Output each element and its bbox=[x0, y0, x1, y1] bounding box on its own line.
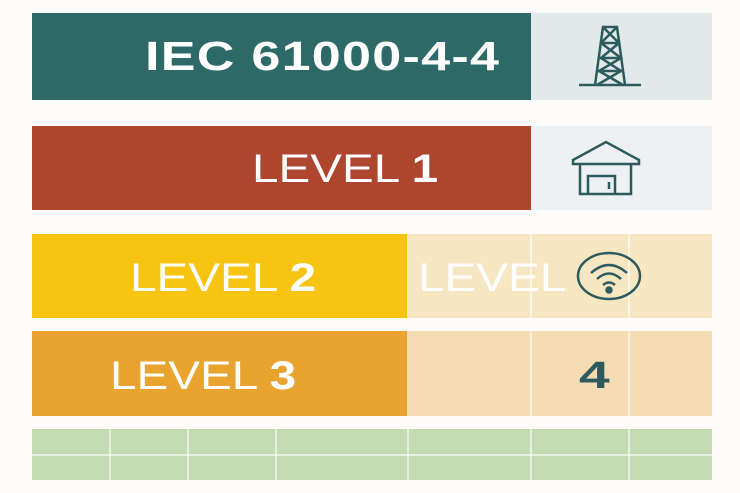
panel: peach cell bbox=[407, 331, 712, 416]
row: IEC standard bbox=[32, 13, 712, 100]
label: LEVEL 1: LEVEL 1 bbox=[252, 147, 438, 191]
icon: wifi bbox=[576, 252, 642, 300]
panel: teal title bar bbox=[32, 13, 531, 100]
label: LEVEL 2: LEVEL 2 bbox=[130, 256, 316, 300]
green grid bbox=[32, 429, 712, 480]
label: LEVEL: LEVEL bbox=[418, 256, 566, 300]
icon: warehouse bbox=[572, 140, 640, 196]
title: IEC 61000-4-4 bbox=[145, 33, 500, 79]
row: Level 1 bbox=[32, 126, 712, 210]
label: 4: 4 bbox=[579, 355, 610, 397]
panel: red bar bbox=[32, 126, 531, 210]
panel: light icon cell bbox=[531, 13, 712, 100]
row: Level 2 bbox=[32, 234, 712, 318]
panel: orange bar bbox=[32, 331, 407, 416]
icon: tower bbox=[579, 26, 641, 86]
label: LEVEL 3: LEVEL 3 bbox=[110, 354, 296, 398]
panel: yellow bar bbox=[32, 234, 407, 318]
panel: light icon cell bbox=[531, 126, 712, 210]
row: Level 3 bbox=[32, 331, 712, 416]
panel: pale cell bbox=[407, 234, 712, 318]
